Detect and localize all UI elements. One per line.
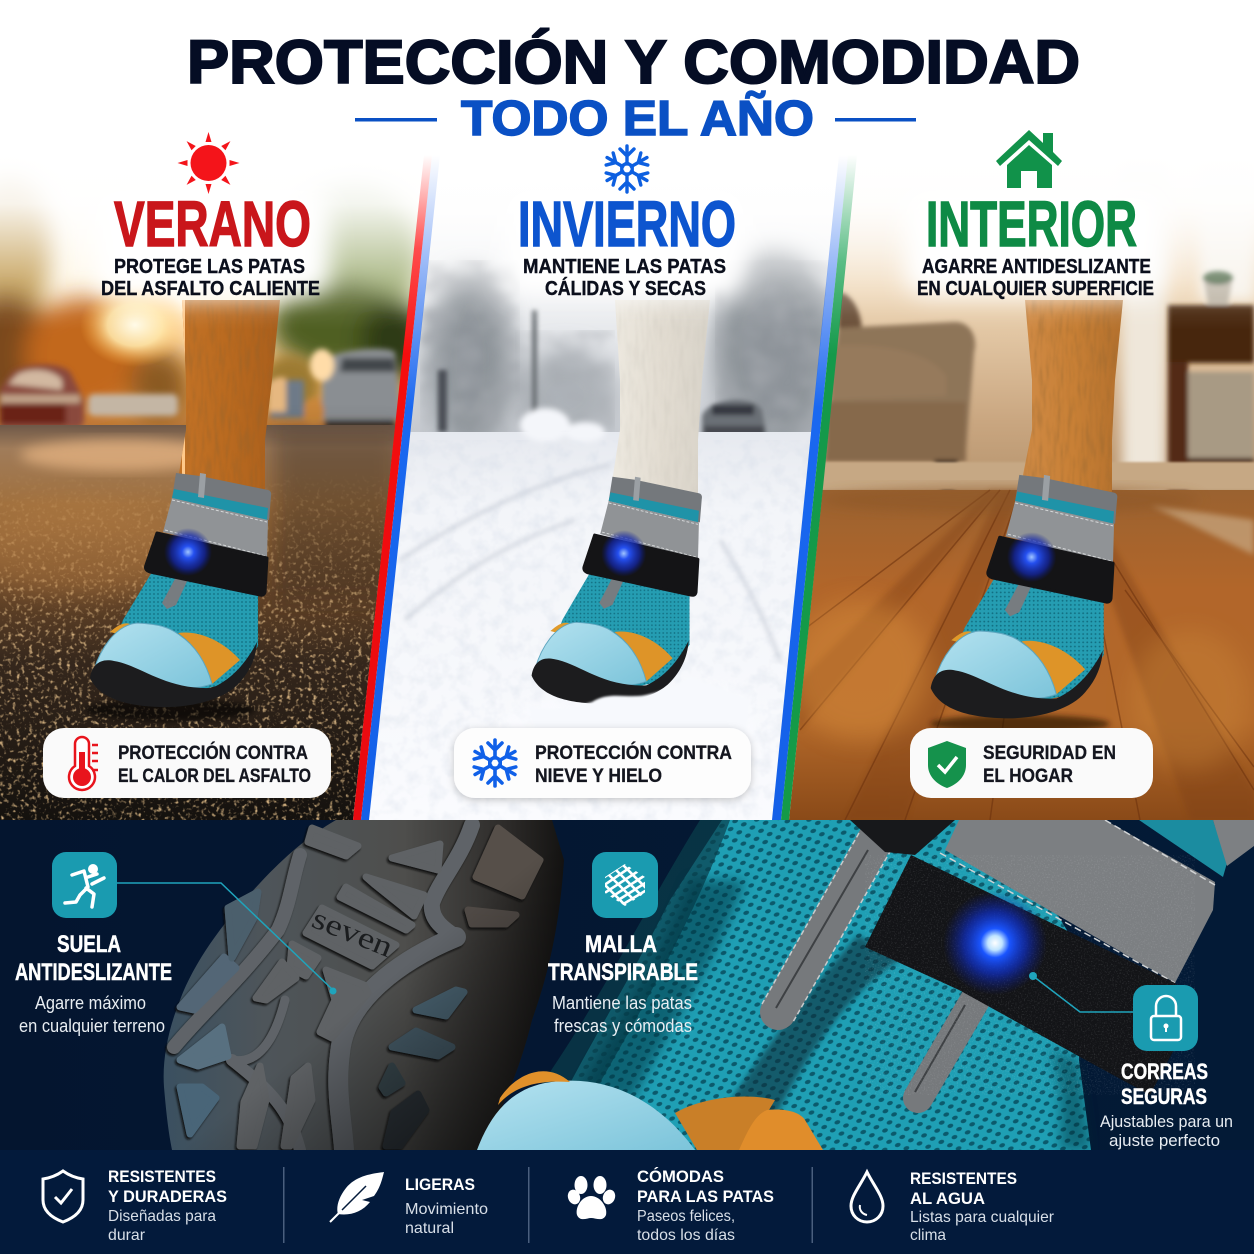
sole logo: seven — [307, 902, 398, 964]
footer text: comodas para las patas: todos los días — [637, 1227, 735, 1244]
footer text: ligeras: natural — [405, 1220, 454, 1237]
text: correas seguras: SEGURAS — [1121, 1084, 1207, 1109]
subtitle: interior — [917, 256, 1154, 300]
title — [187, 28, 1080, 146]
boot: summer — [90, 473, 271, 707]
text: malla transpirable: MALLA — [585, 931, 657, 958]
footer text: resistentes al agua: Listas para cualquier — [910, 1209, 1055, 1226]
boot shadow: summer — [85, 699, 255, 721]
text: suela antideslizante: Agarre máximo — [35, 993, 146, 1013]
text: malla transpirable — [548, 931, 698, 1036]
pointer: suela — [117, 883, 336, 994]
subtitle: interior: EN CUALQUIER SUPERFICIE — [917, 278, 1154, 300]
panel: interior — [789, 219, 1254, 820]
callout: nieve y hielo: PROTECCIÓN CONTRA — [535, 742, 732, 764]
panel: footer — [0, 1150, 1254, 1254]
winter snow scene — [370, 237, 828, 820]
subtitle: verano: PROTEGE LAS PATAS — [114, 256, 305, 278]
text: correas seguras: ajuste perfecto — [1109, 1131, 1220, 1150]
callout: seguridad en el hogar: EL HOGAR — [983, 766, 1073, 787]
panel: product detail — [0, 820, 1254, 1150]
footer text: resistentes al agua: RESISTENTES — [910, 1169, 1017, 1188]
icon: thermometer — [69, 737, 98, 790]
title: PROTECCIÓN Y COMODIDAD — [187, 28, 1080, 96]
icon tile: lock — [1133, 985, 1198, 1051]
footer text: comodas para las patas: PARA LAS PATAS — [637, 1187, 774, 1206]
callout: seguridad en el hogar — [910, 728, 1153, 798]
icon tile: mesh — [592, 852, 658, 918]
heading: invierno: INVIERNO — [518, 188, 736, 260]
mesh shoe detail — [477, 820, 1254, 1150]
footer text: comodas para las patas — [637, 1167, 774, 1244]
living room scene — [789, 219, 1254, 820]
divider: red and blue — [353, 155, 440, 820]
callout: seguridad en el hogar: SEGURIDAD EN — [983, 743, 1116, 764]
icon: sun — [178, 132, 240, 194]
panel: verano — [0, 150, 440, 820]
text: suela antideslizante: en cualquier terreno — [19, 1016, 165, 1036]
footer text: comodas para las patas: CÓMODAS — [637, 1167, 724, 1186]
text: malla transpirable: Mantiene las patas — [552, 993, 692, 1013]
icon: green shield — [928, 741, 966, 788]
summer street scene — [0, 150, 440, 820]
text: malla transpirable: frescas y cómodas — [554, 1016, 692, 1036]
callout: calor del asfalto: EL CALOR DEL ASFALTO — [118, 766, 311, 787]
pointer: correas — [1029, 972, 1133, 1012]
icon: snowflake — [472, 740, 518, 786]
footer text: ligeras: Movimiento — [405, 1201, 488, 1218]
icon: shield — [43, 1171, 83, 1222]
subtitle: invierno: CÁLIDAS Y SECAS — [545, 277, 706, 300]
boot: interior — [931, 475, 1117, 718]
heading: verano: VERANO — [114, 188, 311, 260]
callout: calor del asfalto: PROTECCIÓN CONTRA — [118, 742, 308, 764]
footer text: resistentes al agua: AL AGUA — [910, 1189, 985, 1208]
subtitle: invierno: MANTIENE LAS PATAS — [523, 256, 726, 278]
text: malla transpirable: TRANSPIRABLE — [548, 959, 698, 986]
divider: blue and green — [772, 155, 857, 820]
footer text: resistentes y duraderas: Diseñadas para — [108, 1208, 216, 1225]
icon: snowflake heading — [604, 146, 650, 192]
panel: invierno — [370, 237, 828, 820]
leg: summer — [179, 300, 280, 490]
footer text: resistentes al agua: clima — [910, 1227, 946, 1244]
snow around boot — [583, 689, 662, 704]
icon: paw — [566, 1176, 617, 1219]
footer text: resistentes y duraderas: durar — [108, 1227, 146, 1244]
text: correas seguras: Ajustables para un — [1100, 1112, 1233, 1131]
callout: nieve y hielo — [454, 728, 751, 798]
text: suela antideslizante: ANTIDESLIZANTE — [15, 959, 172, 986]
subtitle: invierno — [523, 256, 726, 300]
text: correas seguras — [1100, 1059, 1233, 1150]
subtitle: verano — [101, 256, 320, 300]
title: TODO EL AÑO — [461, 92, 814, 146]
icon: water drop — [851, 1172, 883, 1222]
text: suela antideslizante: SUELA — [57, 931, 121, 958]
white halos behind headings — [95, 190, 1165, 295]
white top fade over panels — [0, 150, 1254, 330]
footer text: ligeras: LIGERAS — [405, 1175, 475, 1194]
heading: interior: INTERIOR — [926, 188, 1137, 260]
callout: calor del asfalto — [43, 728, 331, 798]
icon tile: running — [52, 852, 117, 918]
leg: interior — [1023, 300, 1123, 492]
footer text: comodas para las patas: Paseos felices, — [637, 1208, 735, 1225]
boot sole close-up — [164, 820, 564, 1150]
subtitle: interior: AGARRE ANTIDESLIZANTE — [922, 256, 1151, 278]
subtitle: verano: DEL ASFALTO CALIENTE — [101, 278, 320, 300]
icon: feather — [330, 1172, 384, 1222]
footer text: resistentes al agua — [910, 1169, 1055, 1244]
text: suela antideslizante — [15, 931, 172, 1036]
boot: winter — [532, 477, 702, 704]
leg: winter — [613, 300, 710, 493]
footer text: resistentes y duraderas — [108, 1167, 227, 1244]
footer text: resistentes y duraderas: RESISTENTES — [108, 1167, 216, 1186]
callout: nieve y hielo: NIEVE Y HIELO — [535, 766, 662, 787]
footer text: ligeras — [405, 1175, 488, 1237]
icon: house — [996, 130, 1062, 188]
footer text: resistentes y duraderas: Y DURADERAS — [108, 1187, 227, 1206]
text: correas seguras: CORREAS — [1121, 1059, 1208, 1084]
